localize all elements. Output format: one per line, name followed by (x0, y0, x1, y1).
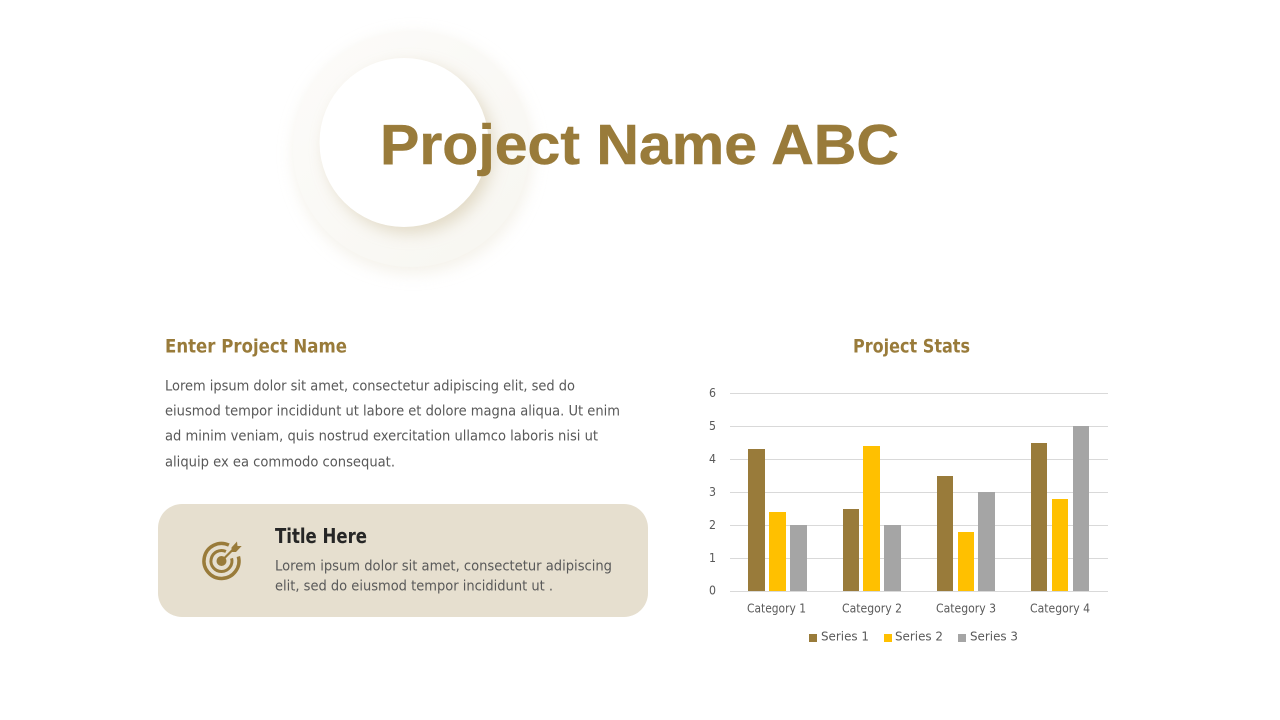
title: Project Name ABC (380, 113, 899, 176)
y axis labels: 3 (709, 485, 716, 499)
body text block: eiusmod tempor incididunt ut labore et dolore magna aliqua. Ut enim (165, 404, 620, 420)
series 2 bars (769, 446, 1068, 591)
callout text: elit, sed do eiusmod tempor incididunt ut . (275, 578, 553, 594)
legend: Series 2 (895, 630, 943, 644)
decorative circles (293, 31, 532, 273)
body text block (165, 378, 620, 470)
body text block: ad minim veniam, quis nostrud exercitation ullamco laboris nisi ut (165, 428, 598, 444)
category labels (747, 602, 1090, 616)
y axis labels: 6 (709, 386, 716, 400)
series 3 bars (790, 426, 1089, 591)
y axis labels: 5 (709, 419, 716, 433)
category labels: Category 4 (1030, 602, 1090, 616)
y axis labels: 2 (709, 518, 716, 532)
legend: Series 1 (821, 630, 869, 644)
heading: project stats: Project Stats (853, 336, 970, 358)
callout title: Title Here (275, 524, 367, 548)
legend (809, 630, 1018, 644)
y axis labels: 0 (709, 584, 716, 598)
bar chart (709, 386, 1108, 644)
legend: Series 3 (970, 630, 1018, 644)
series 1 bars (748, 443, 1047, 591)
body text block: aliquip ex ea commodo consequat. (165, 454, 395, 470)
category labels: Category 2 (842, 602, 902, 616)
category labels: Category 1 (747, 602, 806, 616)
body text block: Lorem ipsum dolor sit amet, consectetur adipiscing elit, sed do (165, 378, 575, 394)
heading: enter project name: Enter Project Name (165, 336, 347, 358)
icon: target with arrow (204, 542, 242, 578)
callout text (275, 558, 612, 594)
y axis labels: 1 (709, 551, 716, 565)
y axis labels: 4 (709, 452, 716, 466)
callout panel (158, 504, 648, 617)
callout text: Lorem ipsum dolor sit amet, consectetur adipiscing (275, 558, 612, 574)
category labels: Category 3 (936, 602, 996, 616)
y axis labels (709, 386, 716, 598)
